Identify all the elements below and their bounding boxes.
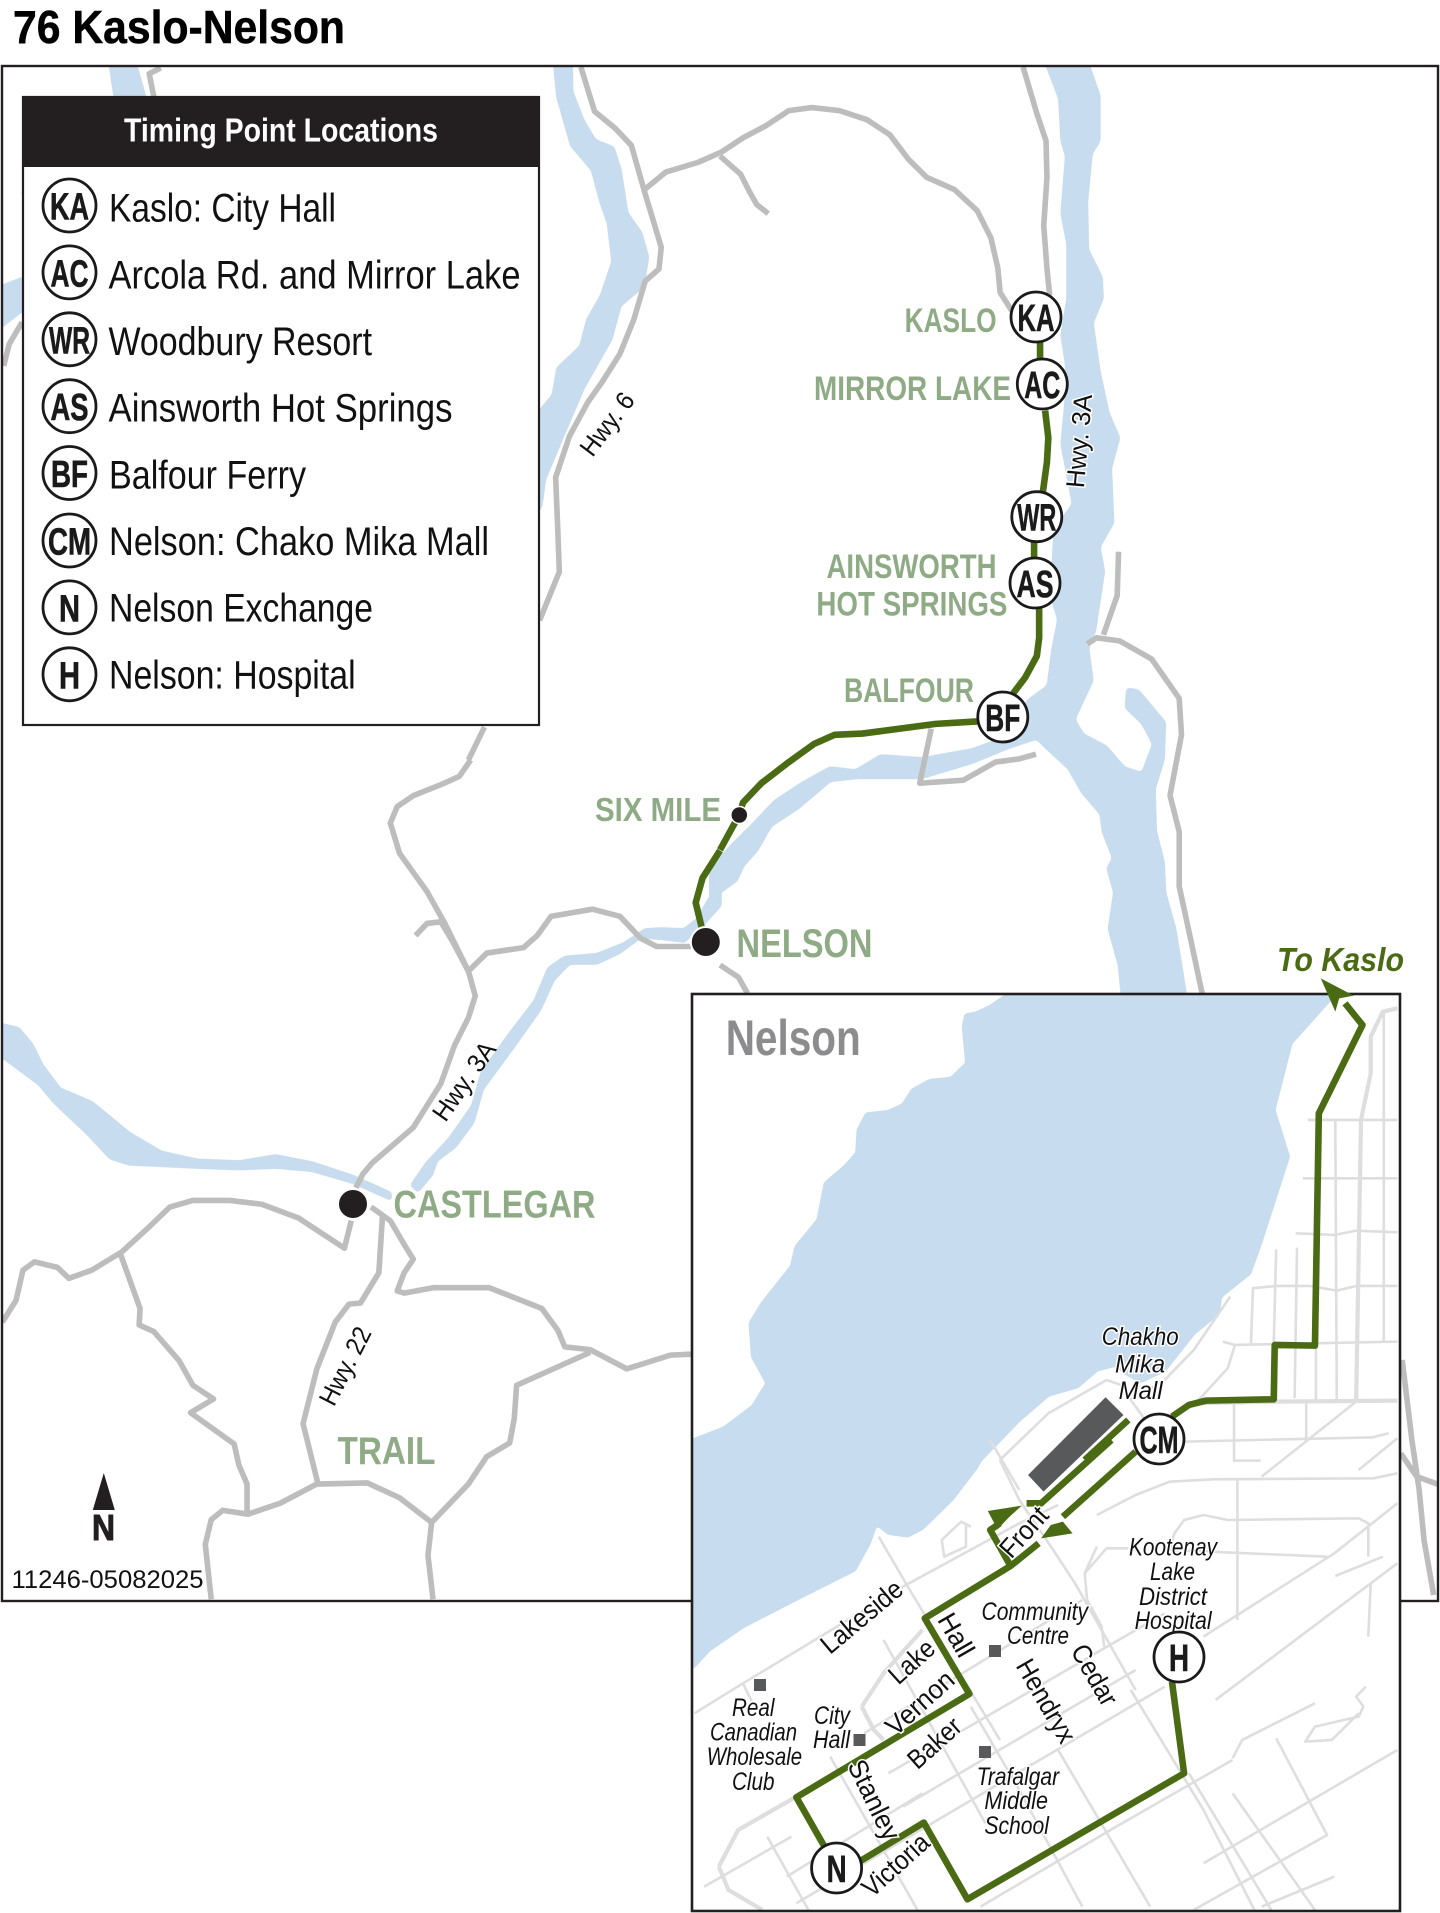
legend row: Exchange: N xyxy=(59,588,80,630)
stop markers: inset map: N xyxy=(827,1849,847,1891)
legend heading xyxy=(22,96,540,167)
landmark labels: Kootenay xyxy=(1129,1534,1218,1562)
stop markers: inset map xyxy=(812,1414,1204,1893)
stop markers: regional map: KA xyxy=(1018,298,1054,340)
legend row: Woodbury: WR xyxy=(49,320,90,362)
street labels: Hendryx xyxy=(1010,1654,1082,1749)
legend row: Chako Mika: Nelson: Chako Mika Mall xyxy=(109,520,489,564)
icon: To Kaslo arrowhead xyxy=(1321,978,1354,1012)
landmark labels: School xyxy=(984,1812,1050,1840)
landmark labels xyxy=(707,1323,1218,1840)
place labels: KASLO xyxy=(905,302,997,340)
route line: Nelson inset xyxy=(796,1003,1362,1899)
stop markers: regional map: AC xyxy=(1024,365,1060,407)
stop markers: regional map xyxy=(978,292,1067,742)
street labels: Cedar xyxy=(1065,1639,1124,1711)
highway labels: Hwy. 22 xyxy=(313,1322,377,1410)
icon: northbound direction arrow on Front xyxy=(988,1506,1022,1529)
legend row: Ainsworth: AS xyxy=(50,387,88,429)
street labels: Baker xyxy=(901,1711,968,1775)
place labels xyxy=(338,302,1011,1473)
street labels: Victoria xyxy=(856,1827,936,1903)
legend row: Kaslo: KA xyxy=(50,186,89,228)
street labels: Lake xyxy=(882,1633,941,1690)
place labels: HOT SPRINGS xyxy=(816,586,1007,624)
legend row: Ainsworth xyxy=(43,380,452,433)
place labels: CASTLEGAR xyxy=(394,1184,596,1226)
landmark labels: Wholesale xyxy=(707,1743,802,1771)
legend row: Balfour xyxy=(43,446,306,500)
place labels: SIX MILE xyxy=(595,791,721,828)
route line: regional section xyxy=(696,341,1048,927)
legend row: Exchange: Nelson Exchange xyxy=(109,587,373,631)
landmark labels: Club xyxy=(732,1768,775,1796)
icon: Chahko Mika Mall building xyxy=(1028,1397,1124,1492)
street labels: Lakeside xyxy=(815,1574,909,1660)
north arrow xyxy=(92,1473,115,1548)
icon: Nelson city dot xyxy=(691,927,721,957)
legend row: Balfour: Balfour Ferry xyxy=(109,453,306,497)
stop markers: regional map: AS xyxy=(1016,564,1054,606)
highway labels: Hwy. 6 xyxy=(573,386,641,462)
landmark labels: City xyxy=(814,1702,851,1730)
landmark squares xyxy=(754,1645,1001,1758)
To Kaslo label: To Kaslo xyxy=(1277,941,1404,978)
legend row: Ainsworth: Ainsworth Hot Springs xyxy=(108,387,452,431)
legend row: Kaslo: Kaslo: City Hall xyxy=(109,186,336,230)
north arrow: N xyxy=(92,1507,115,1548)
panel: timing point locations legend xyxy=(22,96,540,725)
landmark labels: Trafalgar xyxy=(977,1763,1061,1791)
inset lake and streets xyxy=(670,980,1397,1910)
legend heading: Timing Point Locations xyxy=(124,112,438,148)
stop markers: regional map: BF xyxy=(985,698,1020,740)
street labels: Front xyxy=(993,1500,1055,1564)
legend row: Woodbury xyxy=(43,313,372,366)
landmark labels: Middle xyxy=(984,1787,1048,1815)
street labels xyxy=(815,1500,1124,1903)
legend row: Arcola: AC xyxy=(50,253,88,295)
highway labels: Hwy. 3A xyxy=(426,1035,502,1126)
legend row: Exchange xyxy=(43,581,373,634)
place labels: AINSWORTH xyxy=(826,548,996,586)
legend row: Hospital xyxy=(43,648,356,701)
map code: 11246-05082025 xyxy=(12,1566,204,1594)
legend row: Kaslo xyxy=(43,179,336,232)
highway labels: Hwy. 3A xyxy=(1060,392,1098,489)
legend row: Arcola: Arcola Rd. and Mirror Lake xyxy=(108,253,520,297)
place labels: NELSON xyxy=(736,922,872,966)
legend row: Arcola xyxy=(43,246,520,299)
landmark labels: Hall xyxy=(813,1726,851,1754)
landmark labels: District xyxy=(1139,1583,1208,1611)
inset heading: Nelson xyxy=(726,1010,861,1066)
legend row: Chako Mika: CM xyxy=(48,522,91,564)
landmark labels: Lake xyxy=(1150,1558,1195,1586)
place labels: MIRROR LAKE xyxy=(814,370,1011,408)
street labels: Vernon xyxy=(879,1664,961,1742)
inset frame xyxy=(692,994,1400,1911)
place labels: BALFOUR xyxy=(844,672,974,710)
legend row: Balfour: BF xyxy=(51,454,88,496)
legend row: Hospital: H xyxy=(59,655,80,697)
icon: southbound direction arrow on Front xyxy=(1041,1522,1073,1538)
landmark labels: Community xyxy=(982,1598,1089,1626)
icon: Castlegar city dot xyxy=(338,1189,368,1219)
landmark labels: Hospital xyxy=(1135,1607,1213,1635)
street labels: Hall xyxy=(932,1608,980,1662)
icon: Six Mile stop dot xyxy=(731,806,748,824)
landmark labels: Chakho xyxy=(1102,1323,1179,1351)
stop markers: regional map: WR xyxy=(1017,498,1056,540)
highway labels xyxy=(313,386,1098,1410)
landmark labels: Real xyxy=(732,1694,776,1722)
landmark labels: Canadian xyxy=(710,1719,797,1747)
legend row: Hospital: Nelson: Hospital xyxy=(109,653,356,697)
place labels: TRAIL xyxy=(338,1430,436,1473)
panel: Nelson inset map xyxy=(670,980,1400,1911)
street labels: Stanley xyxy=(842,1755,907,1846)
landmark labels: Centre xyxy=(1007,1622,1069,1650)
legend row: Chako Mika xyxy=(43,514,489,567)
landmark labels: Mika xyxy=(1115,1351,1165,1379)
stop markers: inset map: H xyxy=(1169,1638,1189,1680)
stop markers: inset map: CM xyxy=(1140,1420,1178,1462)
landmark labels: Mall xyxy=(1119,1377,1164,1405)
title: 76 Kaslo-Nelson xyxy=(13,1,345,53)
legend row: Woodbury: Woodbury Resort xyxy=(108,320,372,364)
